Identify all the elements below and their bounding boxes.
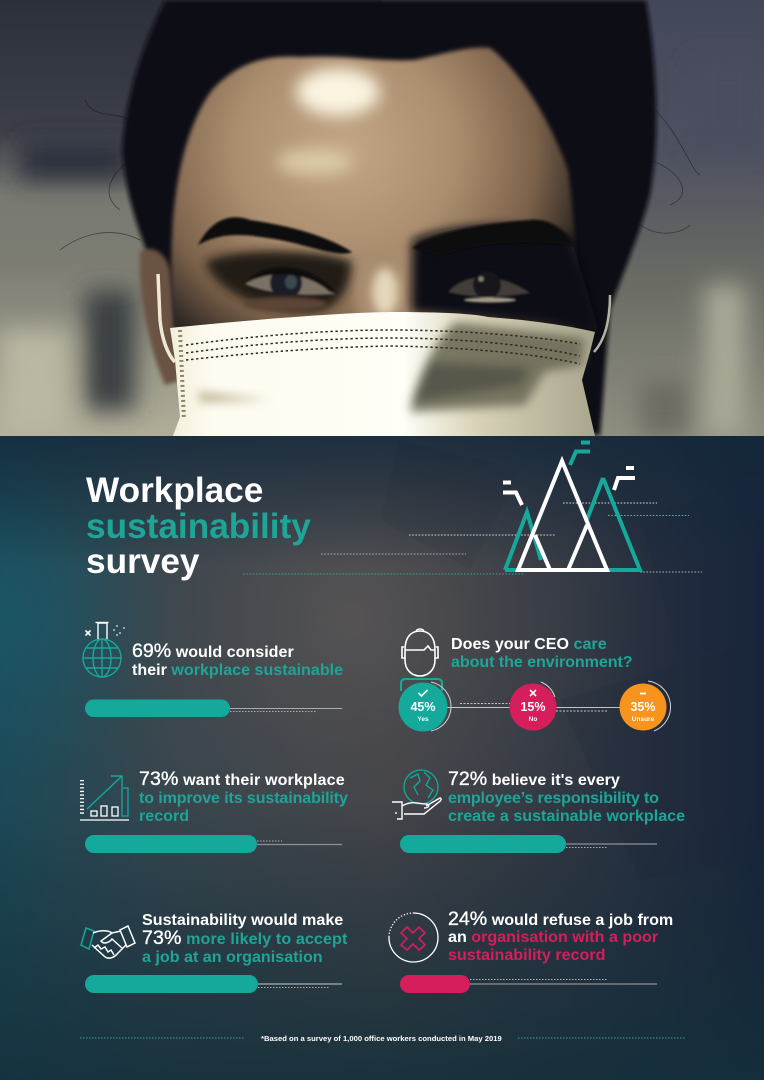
stat: 72% every employee's responsibility: employee’s responsibility to: [448, 789, 659, 807]
stat: 73% want improvement: record: [139, 807, 189, 825]
progress bar 73%: [85, 975, 342, 993]
left eyebrow: [198, 217, 352, 254]
stat: 69% workplace sustainable: their workplace sustainable: [132, 661, 343, 679]
footnote: *Based on a survey of 1,000 office workers conducted in May 2019: [261, 1034, 502, 1043]
stat: CEO care: [398, 629, 671, 732]
title: Workplace: [86, 471, 263, 510]
stat: 73% want improvement: [80, 768, 348, 853]
text: Sustainability would make: [142, 911, 343, 929]
left under-eye: [243, 297, 327, 311]
mask: [158, 274, 610, 436]
icon: hand holding globe: [392, 770, 441, 819]
answer: 45% yes: [398, 682, 451, 732]
title: sustainability: [86, 507, 311, 546]
stat: 69% workplace sustainable: [83, 622, 343, 717]
hair: [122, 0, 656, 436]
text: 69% would consider: [132, 640, 294, 662]
icon: cross in circle: [389, 913, 438, 962]
stat: 24% refuse job: an organisation with a poor: [448, 928, 659, 946]
mask stitching: [180, 330, 580, 420]
icon: mountains: [503, 442, 640, 570]
answer: 15% no: No: [529, 716, 537, 723]
photo: woman wearing a face mask: [0, 0, 764, 436]
stat: sustainability handshake 73%: [81, 911, 348, 993]
stat: sustainability handshake 73%: 73% more likely to accept: [142, 927, 348, 949]
answer: 35% unsure: 35%: [630, 700, 656, 714]
progress bar 69%: [85, 700, 342, 717]
right white tick: [614, 468, 635, 490]
stat: 24% refuse job: sustainability record: [448, 946, 605, 964]
left eye socket: [205, 251, 352, 312]
forehead highlights: [277, 68, 380, 175]
title: [86, 471, 311, 581]
stat: 73% want improvement: to improve its sustainability: [139, 789, 348, 807]
stat: sustainability handshake 73%: a job at an organisation: [142, 948, 323, 966]
text: 73% want their workplace: [139, 768, 345, 790]
mask ear loop left: [158, 274, 175, 362]
right eye: [448, 271, 530, 302]
answer: 35% unsure: [620, 681, 671, 731]
right eye socket shadow: [412, 225, 600, 335]
icon: growth chart: [80, 776, 129, 820]
teal tick: [570, 442, 590, 465]
ear: [140, 249, 182, 385]
title: survey: [86, 542, 200, 581]
right eyebrow: [412, 220, 575, 256]
answer: 15% no: 15%: [520, 700, 546, 714]
progress bar 73%: [85, 835, 342, 853]
stat: CEO care: about the environment?: [451, 653, 633, 671]
stat: 24% refuse job: [389, 908, 673, 993]
blurred buildings: [0, 136, 758, 436]
photo background right: [382, 0, 764, 436]
stat: 72% every employee's responsibility: [392, 768, 685, 853]
icon: head with teal collar: [401, 629, 442, 691]
photo background left: [0, 0, 180, 436]
left eye: [245, 267, 337, 299]
progress bar 24%: [400, 975, 657, 993]
icon: globe flask: [83, 622, 125, 677]
stat: 72% every employee's responsibility: create a sustainable workplace: [448, 807, 685, 825]
nose bridge highlight: [352, 260, 414, 313]
left white tick: [503, 482, 522, 505]
flyaway hairs: [60, 100, 700, 250]
heading: Does your CEO care: [451, 635, 607, 653]
mask shading: [198, 322, 585, 412]
text: 24% would refuse a job from: [448, 908, 673, 930]
answer: 35% unsure: Unsure: [632, 716, 655, 723]
text: 72% believe it's every: [448, 768, 620, 790]
connector lines: [446, 704, 621, 711]
dotted accent lines: [243, 503, 702, 574]
answer: 45% yes: 45%: [410, 700, 436, 714]
progress bar 72%: [400, 835, 657, 853]
mask body: [170, 312, 595, 436]
answer: 15% no: [510, 682, 556, 730]
answer: 45% yes: Yes: [417, 716, 429, 723]
mask ear loop right: [594, 295, 610, 352]
icon: handshake: [81, 926, 135, 958]
face skin: [171, 47, 576, 345]
panel: dark survey background: [0, 436, 764, 1080]
